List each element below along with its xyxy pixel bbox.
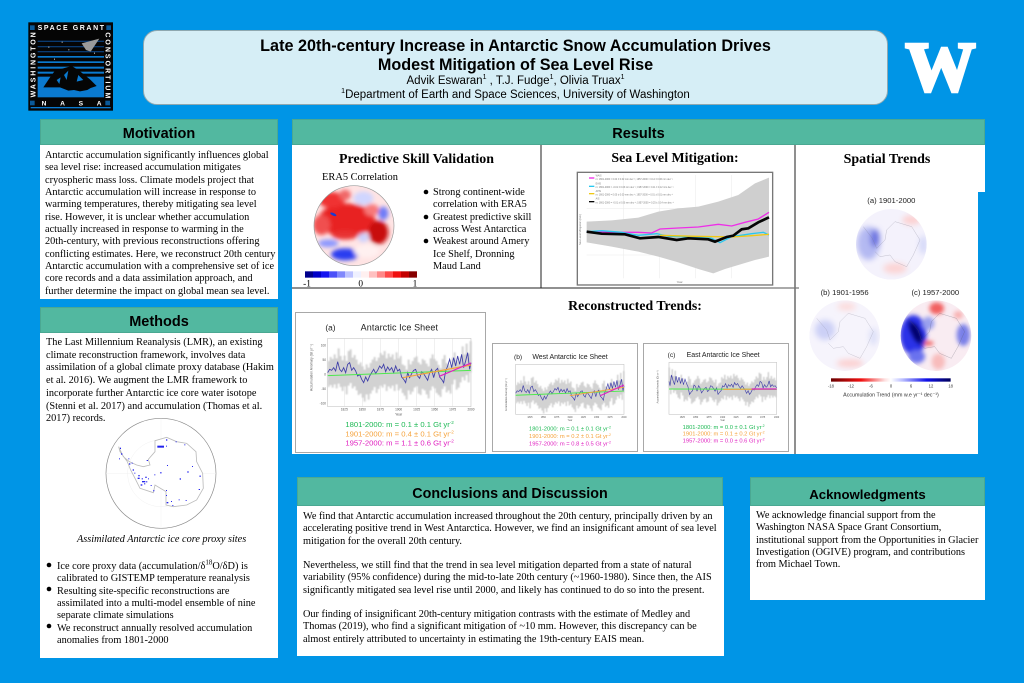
chart: west antarctic ice sheet: -2 bbox=[608, 440, 611, 444]
motivation paragraph: 20th-century, with previous reconstructions offering bbox=[45, 236, 259, 247]
skill bullets: Maud Land bbox=[433, 261, 481, 272]
chart: antarctic ice sheet: 1957-2000: m = 1.1 ± 0.6 Gt yr bbox=[345, 438, 450, 447]
chart: east antarctic ice sheet: Year bbox=[720, 419, 725, 422]
map: spatial trends: 0 bbox=[890, 383, 893, 388]
title: Late 20th-century Increase in Antarctic Snow Accumulation Drives bbox=[260, 37, 771, 55]
chart: east antarctic ice sheet: Accumulation Anomaly (Gt yr⁻¹) bbox=[656, 370, 659, 403]
chart: west antarctic ice sheet: 1950 bbox=[594, 417, 600, 419]
skill bullets bbox=[433, 187, 532, 272]
title box bbox=[143, 30, 888, 105]
authors and affiliation: 1Department of Earth and Space Sciences, University of Washington bbox=[341, 88, 690, 101]
panel: results heading bbox=[292, 119, 985, 145]
panel: acknowledgments bbox=[750, 506, 985, 600]
chart: antarctic ice sheet: 1825 bbox=[341, 407, 348, 411]
map: ERA5 correlation: 1 bbox=[413, 279, 418, 289]
logo: washington space grant: CONSORTIUM bbox=[104, 32, 111, 98]
map: spatial trends: 18 bbox=[948, 383, 954, 388]
conclusions text: We find that Antarctic accumulation increased throughout the 20th century, principally driven by an bbox=[303, 511, 713, 522]
panel: methods heading bbox=[40, 307, 278, 333]
methods paragraph: The Last Millennium Reanalysis (LMR), an existing bbox=[46, 337, 262, 348]
conclusions text: significantly mitigated sea level rise until 2000, and likely has continued to do so into the present. bbox=[303, 585, 704, 596]
map: spatial trends: -18 bbox=[828, 383, 835, 388]
chart: antarctic ice sheet: 1975 bbox=[449, 407, 456, 411]
chart: antarctic ice sheet: Accumulation Anomaly (Gt yr⁻¹) bbox=[309, 344, 313, 391]
heading: predictive skill: Predictive Skill Validation bbox=[339, 152, 494, 167]
skill bullets: across West Antarctica bbox=[433, 224, 526, 235]
chart: antarctic ice sheet: 50 bbox=[322, 358, 326, 362]
chart: west antarctic ice sheet: 1900 bbox=[567, 417, 573, 419]
heading: sea level mitigation: Sea Level Mitigation: bbox=[611, 151, 739, 166]
motivation paragraph: cryospheric mass loss. Climate models project that bbox=[45, 175, 254, 186]
chart: west antarctic ice sheet: Year bbox=[568, 419, 573, 422]
map: spatial trends: (a) 1901-2000 bbox=[867, 196, 915, 205]
panel: motivation heading: Motivation bbox=[123, 126, 195, 142]
chart: sea level mitigation: Year bbox=[677, 280, 683, 284]
panel: methods heading: Methods bbox=[129, 314, 189, 330]
figure label: ERA5 correlation: ERA5 Correlation bbox=[322, 172, 398, 183]
chart: west antarctic ice sheet: 1901-2000: m = 0.2 ± 0.1 Gt yr bbox=[529, 434, 608, 440]
chart: west antarctic ice sheet bbox=[505, 354, 627, 447]
chart: antarctic ice sheet: -2 bbox=[450, 429, 454, 434]
conclusions text: Nevertheless, we still find that the trend in sea level mitigation departed from a state of natural bbox=[303, 560, 692, 571]
chart: east antarctic ice sheet: 1975 bbox=[760, 417, 766, 419]
methods bullets bbox=[57, 559, 256, 646]
chart: antarctic ice sheet: 1950 bbox=[431, 407, 438, 411]
chart: antarctic ice sheet: (a) bbox=[325, 323, 336, 333]
chart: antarctic ice sheet: -2 bbox=[450, 420, 454, 425]
bullet markers bbox=[47, 190, 428, 628]
methods bullets: separate climate simulations bbox=[57, 610, 174, 621]
chart: west antarctic ice sheet: 1875 bbox=[554, 417, 560, 419]
chart: west antarctic ice sheet: 1957-2000: m = 0.8 ± 0.5 Gt yr bbox=[529, 441, 608, 447]
methods paragraph: climate reconstruction framework, involves data bbox=[46, 350, 245, 361]
skill bullets: Weakest around Amery bbox=[433, 236, 529, 247]
chart: east antarctic ice sheet: 1950 bbox=[747, 417, 753, 419]
conclusions text: mitigation for the overall 20th century. bbox=[303, 536, 462, 547]
chart: sea level mitigation: APIS bbox=[596, 190, 601, 193]
map: spatial trends: 12 bbox=[929, 383, 934, 388]
panel: acknowledgments heading: Acknowledgments bbox=[809, 487, 926, 502]
figure frame: antarctic ice sheet bbox=[295, 312, 486, 453]
map: spatial trends: (c) 1957-2000 bbox=[911, 288, 959, 297]
chart: west antarctic ice sheet: 1850 bbox=[541, 417, 547, 419]
figure frame: east antarctic bbox=[643, 343, 789, 452]
map: spatial trends: (b) 1901-1956 bbox=[821, 288, 869, 297]
map: ERA5 correlation: 0 bbox=[358, 279, 363, 289]
chart: east antarctic ice sheet: 1801-2000: m = 0.0 ± 0.1 Gt yr bbox=[683, 425, 762, 431]
panel: conclusions heading: Conclusions and Discussion bbox=[412, 486, 608, 502]
chart: west antarctic ice sheet: 1801-2000: m = 0.1 ± 0.1 Gt yr bbox=[529, 427, 608, 433]
methods bullets: Resulting site-specific reconstructions are bbox=[57, 586, 229, 597]
chart: sea level mitigation: WAIS bbox=[596, 175, 602, 178]
chart: east antarctic ice sheet: 1901-2000: m = 0.1 ± 0.2 Gt yr bbox=[683, 432, 762, 438]
conclusions text: accelerating positive trend in West Antarctica. However, we find an insignificant amount of sea level bbox=[303, 523, 717, 534]
acknowledgments text: from Michael Town. bbox=[756, 559, 840, 570]
chart: west antarctic ice sheet: 2000 bbox=[621, 417, 627, 419]
conclusions text: Our finding of insignificant 20th-century mitigation contrasts with the estimate of Medley and bbox=[303, 609, 690, 620]
chart: west antarctic ice sheet: 1925 bbox=[581, 417, 587, 419]
skill bullets: Strong continent-wide bbox=[433, 187, 525, 198]
acknowledgments text bbox=[756, 510, 978, 570]
motivation paragraph: conflicting estimates. Here, we reconstruct 20th century bbox=[45, 249, 275, 260]
motivation paragraph: actually increased in response to warming in the bbox=[45, 224, 244, 235]
panel: motivation heading bbox=[40, 119, 278, 145]
map caption: Assimilated Antarctic ice core proxy sites bbox=[77, 534, 246, 545]
map a bbox=[856, 209, 927, 280]
skill bullets: Greatest predictive skill bbox=[433, 212, 531, 223]
chart: sea level mitigation: m: 1801-2000 = -0.01 ± 0.03 mm dec⁻¹; 1957-2000 = 0.11 ± 0.12 mm dec⁻¹ bbox=[596, 186, 674, 189]
panel: conclusions heading bbox=[297, 477, 723, 506]
chart: east antarctic ice sheet: (c) bbox=[668, 352, 675, 359]
chart: sea level mitigation: AIS bbox=[596, 197, 600, 200]
panel: acknowledgments heading bbox=[750, 477, 985, 506]
panel: methods bbox=[40, 333, 278, 658]
conclusions text: Thomas (2019), who find a significant mitigation of ~10 mm. However, this discrepancy can be bbox=[303, 621, 697, 632]
map b bbox=[809, 300, 880, 371]
authors and affiliation: Advik Eswaran1 , T.J. Fudge1, Olivia Truax1 bbox=[407, 74, 624, 87]
chart: west antarctic ice sheet: -2 bbox=[608, 433, 611, 437]
title bbox=[260, 37, 771, 74]
methods bullets: We reconstruct annually resolved accumulation bbox=[57, 623, 252, 634]
heading: spatial trends: Spatial Trends bbox=[844, 152, 930, 167]
acknowledgments text: We acknowledge financial support from the bbox=[756, 510, 936, 521]
chart: west antarctic ice sheet: Accumulation Anomaly (Gt yr⁻¹) bbox=[505, 378, 508, 411]
methods paragraph: et al. 2016). We augment the LMR framework to bbox=[46, 375, 247, 386]
chart: east antarctic ice sheet: 1875 bbox=[706, 417, 712, 419]
chart: east antarctic ice sheet: 1825 bbox=[680, 417, 686, 419]
chart: west antarctic ice sheet: (b) bbox=[514, 354, 522, 361]
figure frame: west antarctic bbox=[492, 343, 638, 452]
chart: antarctic ice sheet: 2000 bbox=[467, 407, 475, 411]
conclusions text: variability (95% confidence) during the mid-to-late 20th century (~1960-1980). Since then, the AIS bbox=[303, 572, 712, 583]
motivation paragraph: further determine the impact on global mean sea level. bbox=[45, 286, 269, 297]
chart: antarctic ice sheet bbox=[309, 323, 475, 447]
chart: west antarctic ice sheet: 1975 bbox=[607, 417, 613, 419]
map: spatial trends: Accumulation Trend (mm w.e yr⁻¹ dec⁻¹) bbox=[843, 392, 939, 398]
motivation paragraph: Antarctic accumulation with a comprehensive set of ice bbox=[45, 261, 274, 272]
chart: east antarctic ice sheet: -2 bbox=[762, 431, 765, 435]
chart: antarctic ice sheet: -50 bbox=[321, 387, 326, 391]
chart: antarctic ice sheet: -100 bbox=[320, 401, 326, 405]
chart: sea level mitigation bbox=[577, 172, 773, 285]
chart: antarctic ice sheet: 100 bbox=[321, 343, 326, 347]
map: spatial trends: 6 bbox=[910, 383, 913, 388]
logo: washington space grant: NASA bbox=[42, 100, 115, 107]
motivation paragraph: warming temperatures, thereby mitigating sea level bbox=[45, 199, 257, 210]
chart: east antarctic ice sheet: 1957-2000: m = 0.0 ± 0.6 Gt yr bbox=[683, 438, 762, 444]
chart: sea level mitigation: m: 1801-2000 = 0.00 ± 0.00 mm dec⁻¹; 1957-2000 = 0.01 ± 0.01 mm dec⁻¹ bbox=[596, 193, 673, 196]
chart: east antarctic ice sheet: East Antarctic Ice Sheet bbox=[687, 352, 760, 359]
map: spatial trends bbox=[809, 196, 971, 398]
conclusions text bbox=[303, 511, 717, 645]
chart: east antarctic ice sheet: -2 bbox=[762, 437, 765, 441]
chart: east antarctic ice sheet: 1900 bbox=[720, 417, 726, 419]
chart: antarctic ice sheet: Year bbox=[395, 412, 403, 416]
chart: east antarctic ice sheet: -2 bbox=[762, 424, 765, 428]
panel: results bbox=[292, 145, 978, 454]
methods paragraph: assimilation of a global climate proxy database (Hakim bbox=[46, 362, 274, 373]
chart: east antarctic ice sheet: 1850 bbox=[693, 417, 699, 419]
chart: antarctic ice sheet: 1925 bbox=[413, 407, 420, 411]
acknowledgments text: Investigation (OGIVE) program, and contributions bbox=[756, 547, 965, 558]
acknowledgments text: Washington NASA Space Grant Consortium, bbox=[756, 522, 941, 533]
title: Modest Mitigation of Sea Level Rise bbox=[378, 56, 653, 74]
panel: motivation text bbox=[40, 145, 278, 299]
map: spatial trends: -12 bbox=[848, 383, 855, 388]
panel: results heading: Results bbox=[612, 126, 665, 142]
logo: washington space grant: WASHINGTON bbox=[30, 32, 37, 97]
logo: washington space grant: SPACE GRANT bbox=[38, 25, 105, 32]
skill bullets: Ice Shelf, Dronning bbox=[433, 249, 514, 260]
methods bullets: anomalies from 1801-2000 bbox=[57, 635, 169, 646]
chart: east antarctic ice sheet: 2000 bbox=[774, 417, 780, 419]
motivation paragraph bbox=[45, 150, 276, 297]
chart: antarctic ice sheet: 1901-2000: m = 0.4 ± 0.1 Gt yr bbox=[345, 429, 450, 438]
heading: reconstructed trends: Reconstructed Trends: bbox=[568, 298, 702, 313]
map: spatial trends: -6 bbox=[869, 383, 874, 388]
methods paragraph: 2017) records. bbox=[46, 413, 105, 424]
methods paragraph: (Stenni et al. 2017) and accumulation (Thomas et al. bbox=[46, 401, 262, 412]
map: ice core proxy sites bbox=[106, 418, 216, 528]
chart: west antarctic ice sheet: 1825 bbox=[527, 417, 533, 419]
acknowledgments text: institutional support from the Opportunities in Glacier bbox=[756, 535, 978, 546]
chart: sea level mitigation: EAIS bbox=[596, 182, 601, 185]
panel: conclusions bbox=[297, 506, 724, 656]
motivation paragraph: Antarctic accumulation significantly influences global bbox=[45, 150, 269, 161]
motivation paragraph: sea level rise: increased accumulation mitigates bbox=[45, 162, 241, 173]
chart: east antarctic ice sheet bbox=[656, 352, 780, 444]
map: ERA5 correlation bbox=[303, 186, 418, 289]
chart: antarctic ice sheet: Antarctic Ice Sheet bbox=[361, 323, 438, 333]
chart: west antarctic ice sheet: West Antarctic Ice Sheet bbox=[532, 354, 608, 361]
chart: antarctic ice sheet: 0 bbox=[324, 372, 326, 376]
methods paragraph: incorporate further Antarctic ice core water isotope bbox=[46, 388, 256, 399]
methods bullets: calibrated to GISTEMP temperature reanalysis bbox=[57, 573, 250, 584]
skill bullets: correlation with ERA5 bbox=[433, 199, 527, 210]
logo: washington space grant bbox=[28, 22, 115, 111]
methods paragraph bbox=[46, 337, 274, 424]
chart: sea level mitigation: Sea Level Mitigation (mm) bbox=[578, 214, 582, 245]
logo: university W: W bbox=[906, 30, 976, 106]
chart: sea level mitigation: m: 1801-2000 = -0.01 ± 0.03 mm dec⁻¹; 1957-2000 = 0.25 ± 0.14 mm dec⁻¹ bbox=[596, 201, 674, 204]
authors and affiliation bbox=[341, 74, 690, 101]
chart: antarctic ice sheet: 1801-2000: m = 0.1 ± 0.1 Gt yr bbox=[345, 420, 450, 429]
motivation paragraph: Antarctic accumulation will increase in response to bbox=[45, 187, 256, 198]
chart: east antarctic ice sheet: 1925 bbox=[733, 417, 739, 419]
conclusions text: almost entirely attributed to uncertainty in estimating the 19th-century EAIS mean. bbox=[303, 634, 644, 645]
motivation paragraph: core records and a data assimilation approach, and bbox=[45, 273, 253, 284]
chart: antarctic ice sheet: 1850 bbox=[359, 407, 366, 411]
methods bullets: Ice core proxy data (accumulation/δ18O/δD) is bbox=[57, 559, 248, 572]
chart: antarctic ice sheet: -2 bbox=[450, 438, 454, 443]
chart: west antarctic ice sheet: -2 bbox=[608, 426, 611, 430]
map: ERA5 correlation: -1 bbox=[303, 279, 311, 289]
map c bbox=[900, 300, 971, 371]
chart: antarctic ice sheet: 1900 bbox=[395, 407, 402, 411]
top-right white strip bbox=[978, 145, 985, 192]
chart: antarctic ice sheet: 1875 bbox=[377, 407, 384, 411]
results dividers bbox=[292, 145, 799, 454]
chart: sea level mitigation: m: 1801-2000 = 0.04 ± 0.02 mm dec⁻¹; 1957-2000 = 0.14 ± 0.06 mm dec⁻¹ bbox=[596, 178, 673, 181]
motivation paragraph: rise. However, it is unclear whether accumulation bbox=[45, 212, 249, 223]
methods bullets: assimilated into a multi-model ensemble of nine bbox=[57, 598, 255, 609]
